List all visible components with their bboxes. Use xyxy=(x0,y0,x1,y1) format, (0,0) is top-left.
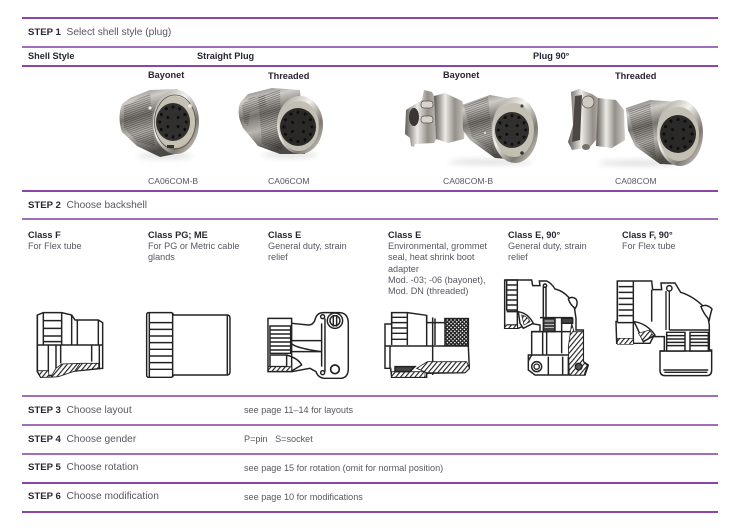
drawing: class E backshell xyxy=(268,313,348,378)
text: class E general duty: General duty, strain xyxy=(268,241,347,251)
text: class PG ME: glands xyxy=(148,252,175,262)
text: class E environmental xyxy=(388,230,487,296)
drawing: class E 90 degree backshell xyxy=(505,280,588,375)
heading: step 1: STEP 1 Select shell style (plug) xyxy=(28,27,171,38)
text: class E general duty xyxy=(268,230,347,262)
part number: CA06COM-B: CA06COM-B xyxy=(148,176,198,186)
drawing: class E environmental backshell xyxy=(385,313,469,377)
text: class E environmental: Mod. -03; -06 (bayonet), xyxy=(388,275,486,285)
photo: 90 degree threaded plug xyxy=(568,89,703,166)
text: class F 90 degrees: Class F, 90° xyxy=(622,230,673,240)
text: class E general duty: Class E xyxy=(268,230,301,240)
text: class F 90 degrees xyxy=(622,230,676,251)
text: class E 90 degrees: General duty, strain xyxy=(508,241,587,251)
part number: CA08COM-B: CA08COM-B xyxy=(443,176,493,186)
heading: step 5: STEP 5 Choose rotation xyxy=(28,462,138,473)
text: class E environmental: Environmental, grommet xyxy=(388,241,487,251)
label: bayonet 90: Bayonet xyxy=(443,70,479,80)
text: class E 90 degrees: Class E, 90° xyxy=(508,230,560,240)
text: class E environmental: adapter xyxy=(388,264,419,274)
text: class E environmental: seal, heat shrink boot xyxy=(388,252,474,262)
text: class E 90 degrees: relief xyxy=(508,252,528,262)
table header: shell style: Shell Style xyxy=(28,51,74,61)
drawing: class PG ME backshell xyxy=(147,313,230,377)
text: class PG ME: For PG or Metric cable xyxy=(148,241,239,251)
heading: step 2: STEP 2 Choose backshell xyxy=(28,200,147,211)
part number: CA08COM: CA08COM xyxy=(615,176,657,186)
note: step 5: see page 15 for rotation (omit for normal position) xyxy=(244,463,443,473)
photo: straight bayonet plug xyxy=(120,89,199,159)
text: class PG ME xyxy=(148,230,239,262)
photo: 90 degree bayonet plug xyxy=(405,90,538,165)
text: class E environmental: Class E xyxy=(388,230,421,240)
text: class F: Class F xyxy=(28,230,61,240)
note: step 3: see page 11–14 for layouts xyxy=(244,405,353,415)
part number: CA06COM: CA06COM xyxy=(268,176,310,186)
text: class E environmental: Mod. DN (threaded) xyxy=(388,286,468,296)
heading: step 6: STEP 6 Choose modification xyxy=(28,491,159,502)
text: class F xyxy=(28,230,82,251)
photo: straight threaded plug xyxy=(239,88,323,158)
heading: step 4: STEP 4 Choose gender xyxy=(28,434,136,445)
label: threaded 90: Threaded xyxy=(615,71,656,81)
heading: step 3: STEP 3 Choose layout xyxy=(28,405,132,416)
text: class E general duty: relief xyxy=(268,252,288,262)
drawing: class F 90 degree backshell xyxy=(616,281,712,376)
table header: plug 90 degrees: Plug 90° xyxy=(533,51,569,61)
label: threaded straight: Threaded xyxy=(268,71,309,81)
note: step 6: see page 10 for modifications xyxy=(244,492,363,502)
text: class F: For Flex tube xyxy=(28,241,82,251)
text: class E 90 degrees xyxy=(508,230,587,262)
drawing: class F backshell xyxy=(37,313,103,377)
text: class PG ME: Class PG; ME xyxy=(148,230,208,240)
label: bayonet straight: Bayonet xyxy=(148,70,184,80)
text: class F 90 degrees: For Flex tube xyxy=(622,241,676,251)
table header: straight plug: Straight Plug xyxy=(197,51,254,61)
note: step 4: P=pin S=socket xyxy=(244,434,313,444)
